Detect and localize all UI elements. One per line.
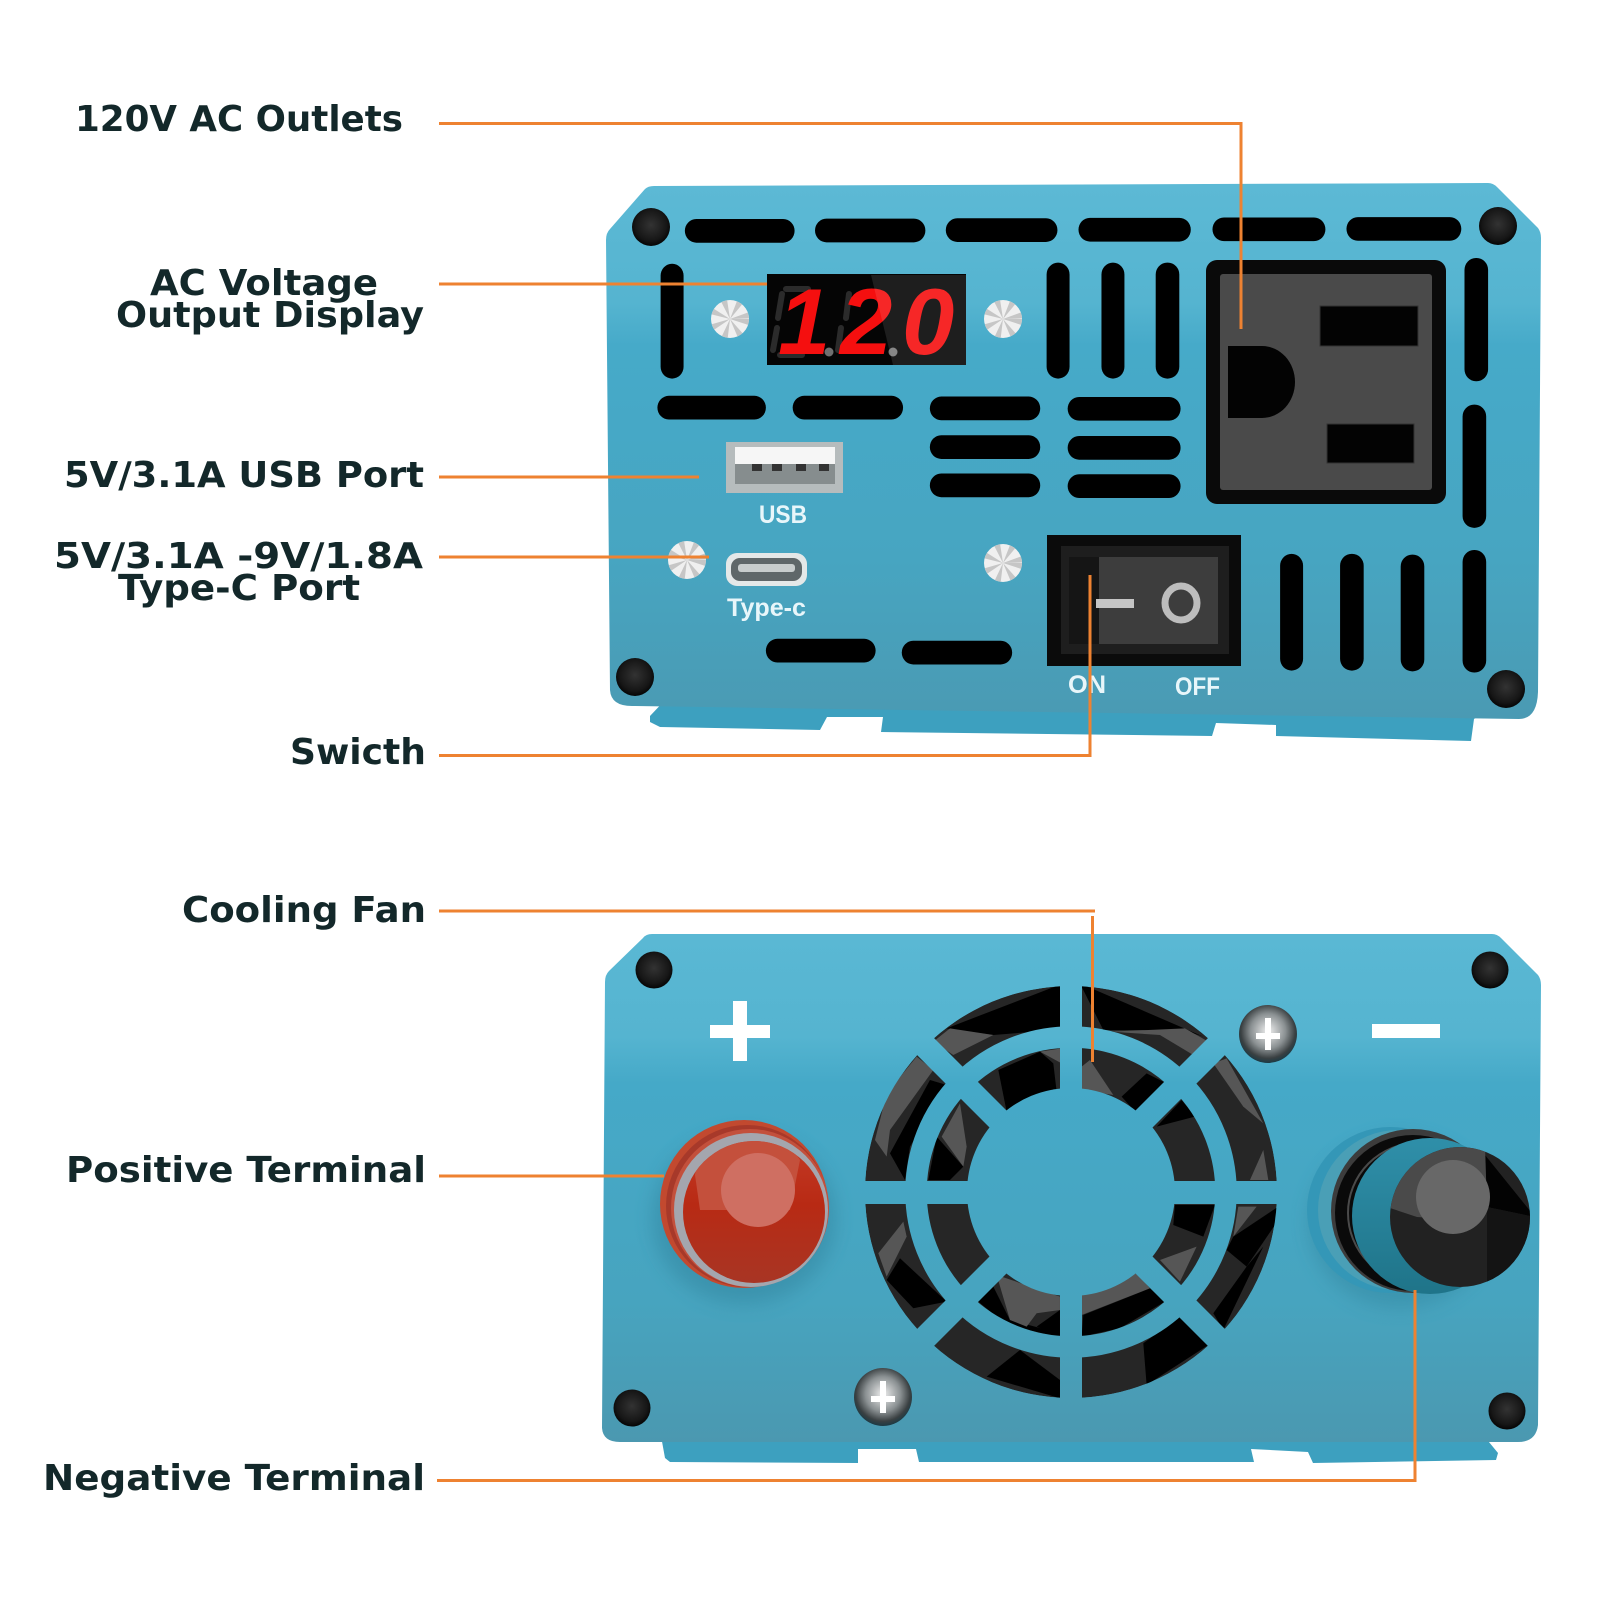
Type-C label: Type-c [727,594,806,622]
line: negative terminal [437,1290,1415,1480]
rocker switch [1047,535,1241,666]
line: 120V AC outlets [439,124,1241,329]
callout lines [437,124,1415,1480]
label: USB Port: 5V/3.1A USB Port [64,455,424,496]
rear plate [602,934,1541,1442]
icon: chrome screw upper [1239,1005,1297,1063]
label: Cooling Fan: Cooling Fan [182,890,426,931]
front plate [606,183,1541,719]
switch label: OFF: OFF [1175,673,1220,701]
USB label: USB [759,501,807,529]
line: AC voltage display [439,282,767,286]
label: AC Voltage: AC Voltage [150,263,378,304]
label: Output Display: Output Display [116,295,424,336]
mounting flange [661,1436,1498,1463]
plus sign [710,1001,770,1061]
icon: silver rivets [668,300,1022,582]
voltage display: 120 [778,269,954,374]
minus sign [1372,1024,1440,1038]
panel: front of inverter [606,183,1541,741]
label: Swicth: Swicth [290,732,426,773]
line: USB port [439,476,699,478]
panel: rear of inverter [602,934,1541,1463]
negative terminal [1307,1127,1535,1308]
line: Type-C port [439,556,709,558]
line: cooling fan vertical [1091,916,1094,1062]
label: Positive Terminal: Positive Terminal [66,1150,426,1191]
icon: corner screws [614,952,1526,1430]
icon: chrome screw lower [854,1368,912,1426]
Type-C port [726,553,807,586]
line: cooling fan horizontal [439,910,1095,912]
line: switch [439,575,1090,756]
switch label: ON: ON [1068,671,1106,699]
vent slots [657,217,1488,672]
label: Type-C Port: Type-C Port [118,568,360,609]
USB port [726,442,843,493]
label: 120V AC Outlets: 120V AC Outlets [75,99,403,140]
AC outlet [1206,260,1446,504]
positive terminal [652,1120,836,1304]
label: Negative Terminal: Negative Terminal [43,1458,425,1499]
icon: corner screws [616,207,1525,708]
mounting flange [650,698,1490,741]
cooling fan [865,983,1278,1398]
line: positive terminal [439,1174,664,1178]
labels [43,99,426,1499]
label: Type-C rating: 5V/3.1A -9V/1.8A [54,536,424,577]
